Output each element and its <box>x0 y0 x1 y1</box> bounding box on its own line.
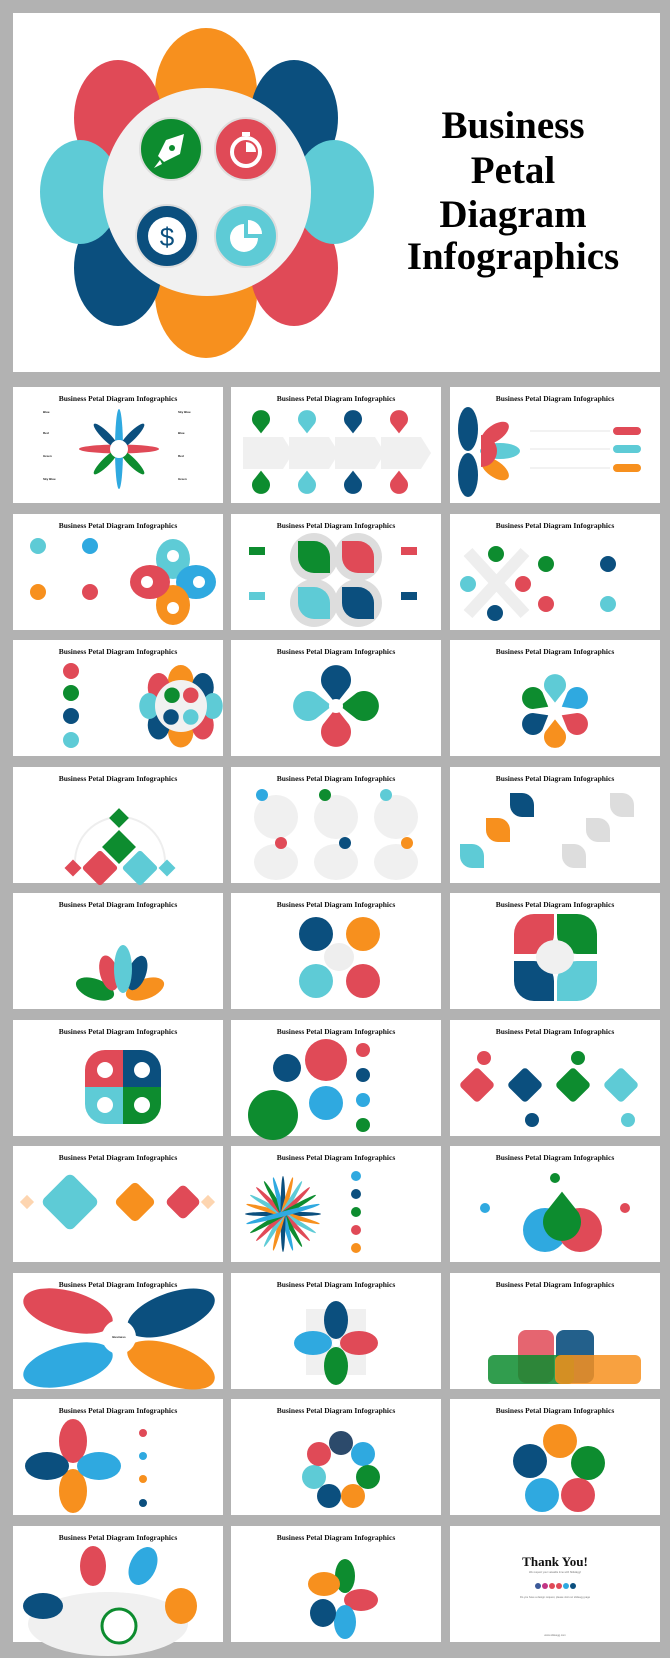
thumb 21: venn drops <box>450 1146 660 1262</box>
thumb 4: hearts and clover: Business Petal Diagram Infographics <box>59 521 177 530</box>
icon: rocket <box>140 118 202 180</box>
thumb 15: quarter leaves <box>450 893 660 1009</box>
thumb 13: lotus: Business Petal Diagram Infographics <box>59 900 177 909</box>
thumb 30: thank you: Thank You! <box>522 1554 588 1569</box>
thumb 23: cross leaves <box>231 1273 441 1389</box>
thumb 26: seven petal ring: Business Petal Diagram Infographics <box>277 1406 395 1415</box>
thumb 26: seven petal ring <box>231 1399 441 1515</box>
thumb 16: quadrant circles: Business Petal Diagram Infographics <box>59 1027 177 1036</box>
thumb 12: diagonal leaves: Business Petal Diagram Infographics <box>496 774 614 783</box>
thumb 1: radial petals: Green <box>43 454 52 458</box>
thumb 10: diamonds with arc <box>13 767 223 886</box>
thumb 14: four circles center: Business Petal Diagram Infographics <box>277 900 395 909</box>
thumb 30: thank you: www.slideegg.com <box>544 1633 566 1637</box>
title: Business <box>441 104 585 147</box>
thumb 29: pinwheel: Business Petal Diagram Infographics <box>277 1533 395 1542</box>
thumb 18: diamond row: Business Petal Diagram Infographics <box>496 1027 614 1036</box>
thumb 19: three diamonds <box>13 1146 223 1262</box>
thumb 15: quarter leaves: Business Petal Diagram Infographics <box>496 900 614 909</box>
thumb 1: radial petals: Blue <box>178 431 185 435</box>
icon: dollar <box>136 205 198 267</box>
thumb 22: butterfly: Business <box>112 1335 126 1339</box>
thumb 5: gray quad <box>231 514 441 630</box>
thumb 3: half flower with pills <box>450 387 660 503</box>
thumb 1: radial petals: Red <box>43 431 49 435</box>
thumb 17: percentage petals: Business Petal Diagram Infographics <box>277 1027 395 1036</box>
thumb 7: small flower: Business Petal Diagram Infographics <box>59 647 177 656</box>
thumb 30: thank you: We respect your valuable time with SlideEgg! <box>529 1570 581 1574</box>
title: Diagram <box>439 193 587 236</box>
thumb 9: six petal flower: Business Petal Diagram Infographics <box>496 647 614 656</box>
thumb 5: gray quad: Business Petal Diagram Infographics <box>277 521 395 530</box>
thumb 30: thank you: Do you have a design request, please visit our slideegg page <box>520 1595 591 1599</box>
thumb 13: lotus <box>13 893 223 1009</box>
title: Petal <box>471 149 555 192</box>
thumb 30: thank you <box>450 1526 660 1642</box>
thumb 10: diamonds with arc: Business Petal Diagram Infographics <box>59 774 177 783</box>
thumb 1: radial petals: Business Petal Diagram Infographics <box>59 394 177 403</box>
thumb 1: radial petals: Blue <box>43 410 50 414</box>
thumb 22: butterfly: Business Petal Diagram Infographics <box>59 1280 177 1289</box>
thumb 24: overlapping blocks <box>450 1273 660 1389</box>
title: Infographics <box>407 235 619 278</box>
thumb 1: radial petals: Green <box>178 477 187 481</box>
thumb 1: radial petals: Sky Blue <box>43 477 56 481</box>
icon: stopwatch <box>215 118 277 180</box>
thumb 6: X with circles <box>450 514 660 630</box>
hero flower diagram <box>40 28 374 358</box>
thumb 14: four circles center <box>231 893 441 1009</box>
thumb 16: quadrant circles <box>13 1020 223 1136</box>
thumb 18: diamond row <box>450 1020 660 1136</box>
thumb 1: radial petals <box>13 387 223 503</box>
thumb 20: starburst: Business Petal Diagram Infographics <box>277 1153 395 1162</box>
thumb 2: drops row: Business Petal Diagram Infographics <box>277 394 395 403</box>
thumb 20: starburst <box>231 1146 441 1262</box>
thumb 25: four leaves <box>13 1399 223 1515</box>
thumb 23: cross leaves: Business Petal Diagram Infographics <box>277 1280 395 1289</box>
thumb 17: percentage petals <box>231 1020 441 1140</box>
thumb 8: four teardrops: Business Petal Diagram Infographics <box>277 647 395 656</box>
icon: pie chart <box>215 205 277 267</box>
thumb 9: six petal flower <box>450 640 660 756</box>
thumb 1: radial petals: Sky Blue <box>178 410 191 414</box>
thumb 27: five drops <box>450 1399 660 1515</box>
thumb 3: half flower with pills: Business Petal Diagram Infographics <box>496 394 614 403</box>
thumb 19: three diamonds: Business Petal Diagram Infographics <box>59 1153 177 1162</box>
thumb 22: butterfly <box>13 1273 223 1400</box>
thumb 4: hearts and clover <box>13 514 223 630</box>
thumb 29: pinwheel <box>231 1526 441 1642</box>
thumb 27: five drops: Business Petal Diagram Infographics <box>496 1406 614 1415</box>
panel: hero slide <box>13 13 660 372</box>
thumb 21: venn drops: Business Petal Diagram Infographics <box>496 1153 614 1162</box>
thumb 12: diagonal leaves <box>450 767 660 883</box>
thumb 25: four leaves: Business Petal Diagram Infographics <box>59 1406 177 1415</box>
thumb 28: arc petals <box>13 1526 223 1656</box>
thumb 6: X with circles: Business Petal Diagram Infographics <box>496 521 614 530</box>
thumb 7: small flower <box>13 640 223 756</box>
thumb 1: radial petals: Red <box>178 454 184 458</box>
thumb 28: arc petals: Business Petal Diagram Infographics <box>59 1533 177 1542</box>
icon: dollar: $ <box>160 222 175 252</box>
thumb 8: four teardrops <box>231 640 441 756</box>
thumb 2: drops row <box>231 387 441 503</box>
thumb 11: gray drops with circles <box>231 767 441 883</box>
thumb 11: gray drops with circles: Business Petal Diagram Infographics <box>277 774 395 783</box>
thumb 24: overlapping blocks: Business Petal Diagram Infographics <box>496 1280 614 1289</box>
